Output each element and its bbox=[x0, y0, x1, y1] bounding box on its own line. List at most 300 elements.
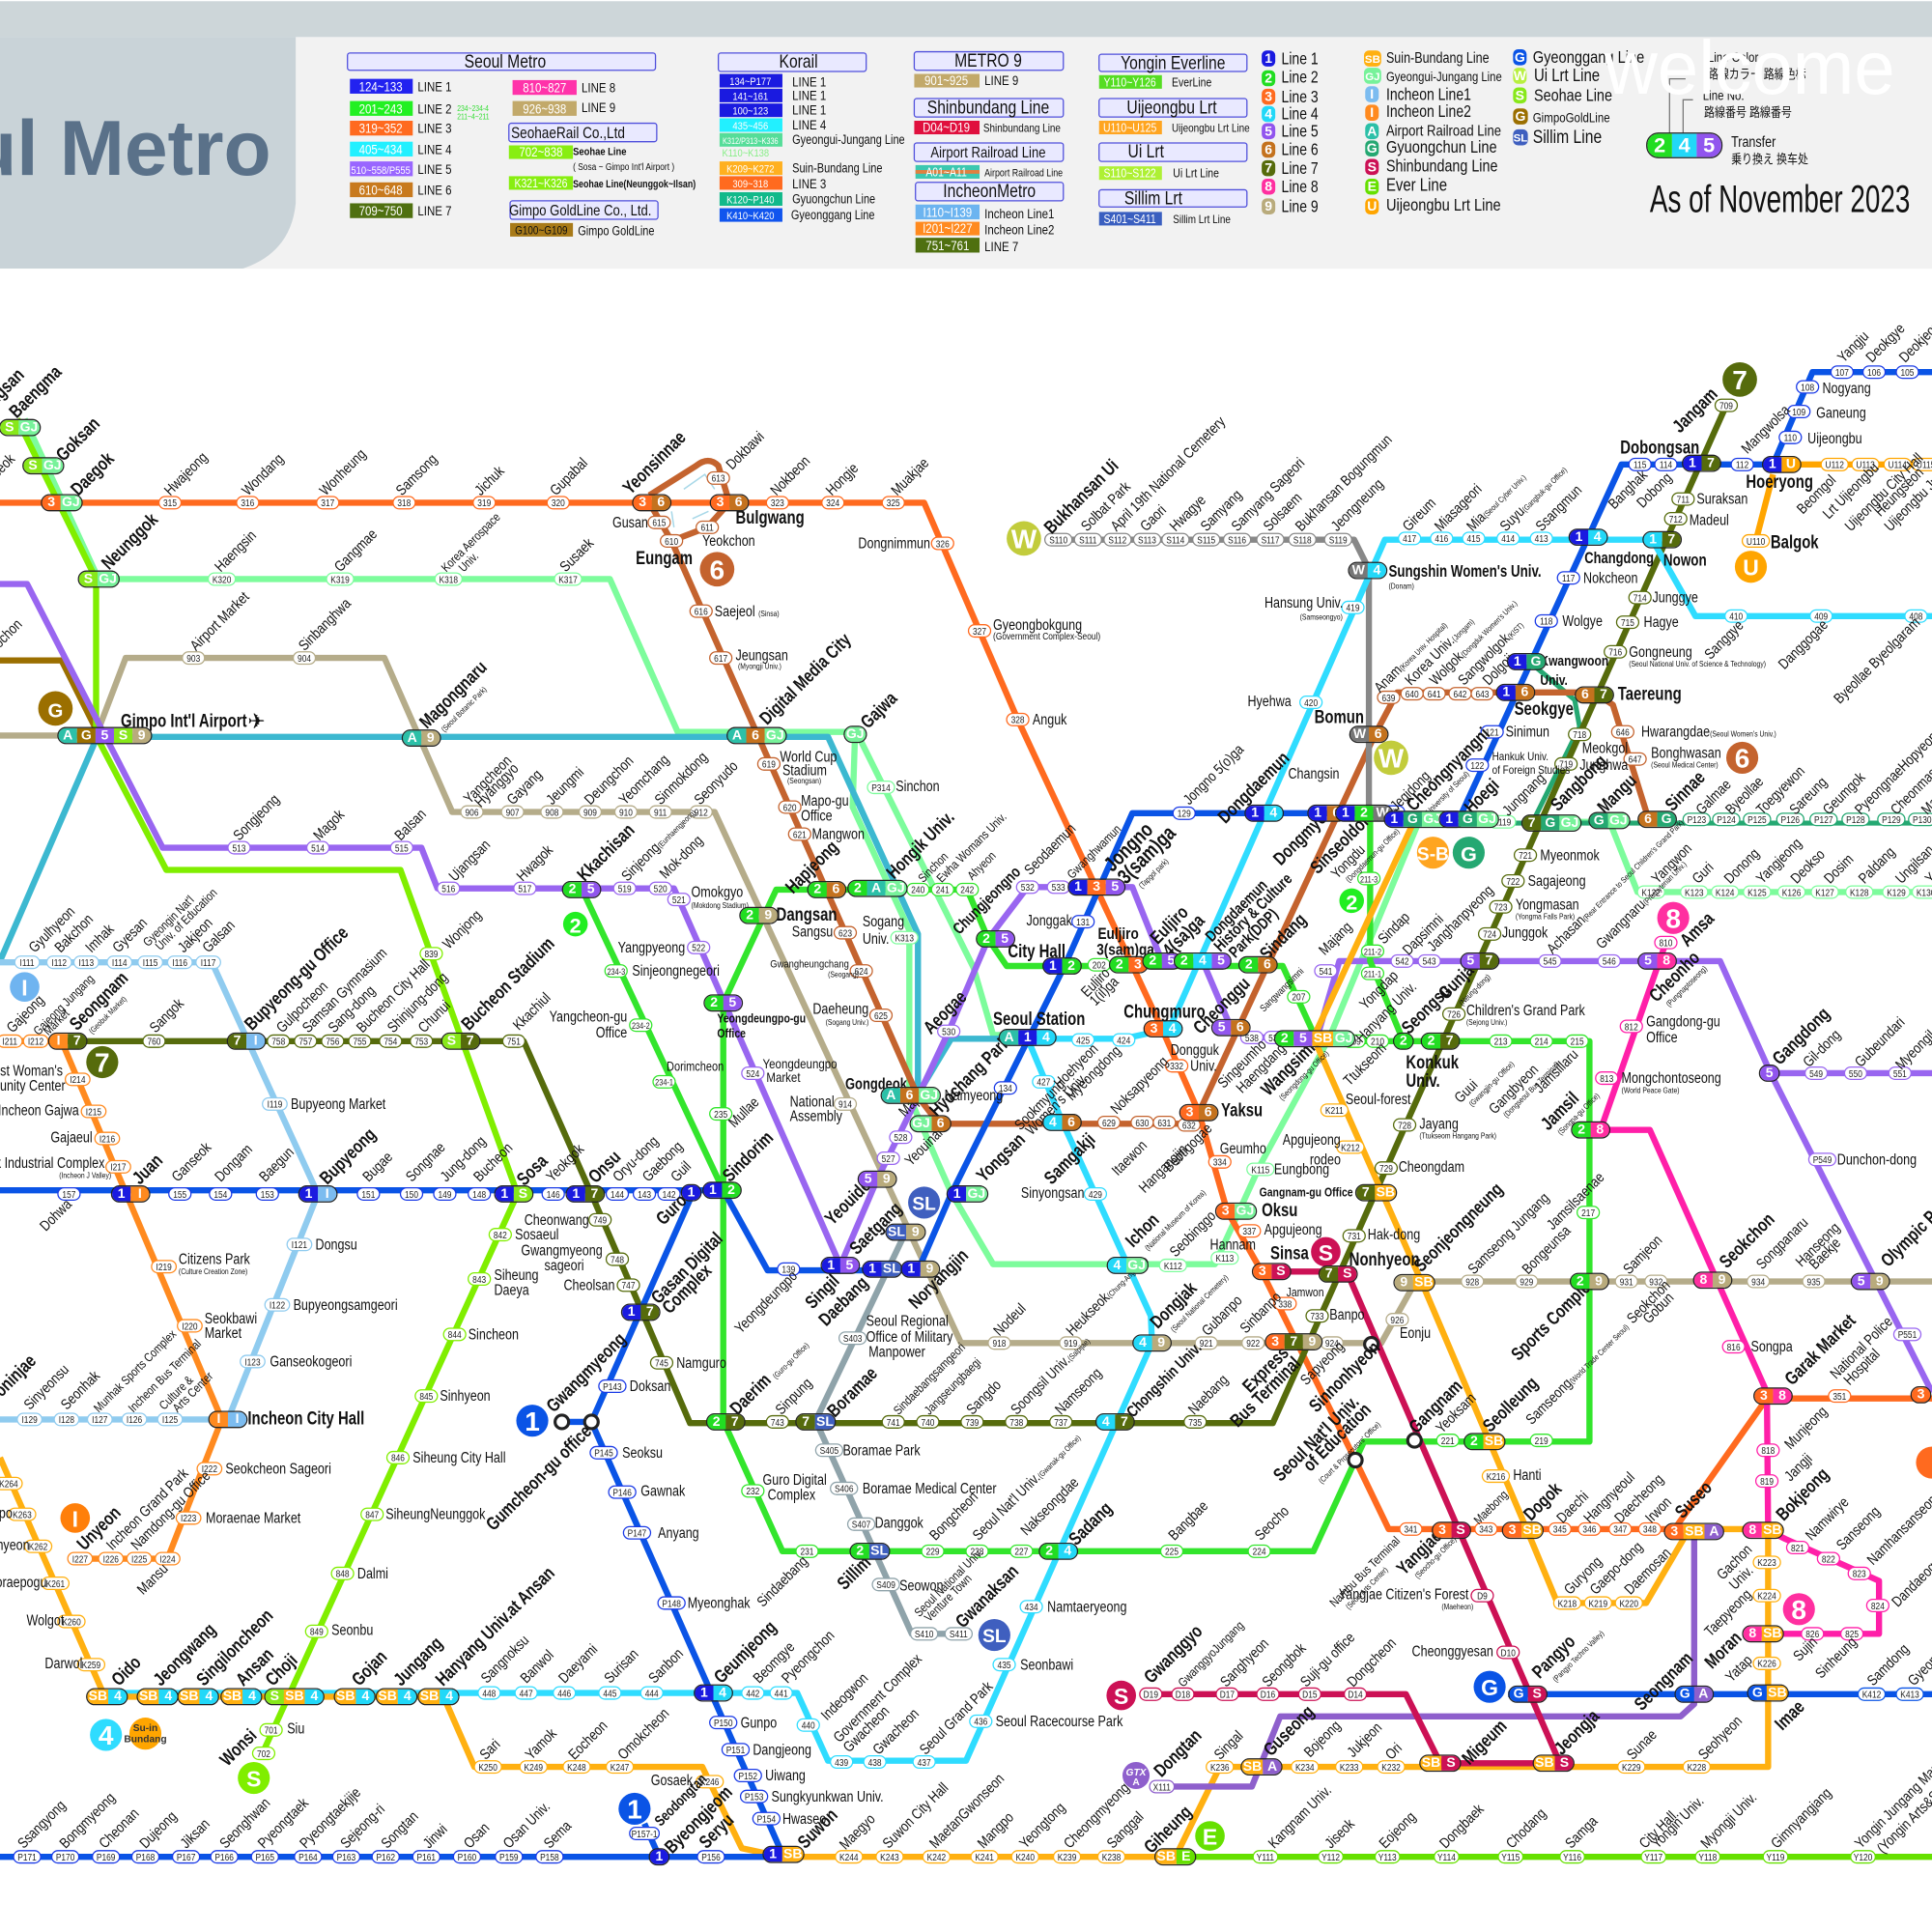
station labels: west: Hongje bbox=[822, 459, 862, 498]
station labels: northeast: (Pungnaptoseong) bbox=[1664, 963, 1709, 1009]
stations: Uijeongbu bbox=[1747, 460, 1932, 547]
interchange station pills: SL bbox=[888, 1225, 905, 1239]
station labels: south centre and east: Nonhyeon bbox=[1350, 1248, 1420, 1269]
station labels: southwest: Gwangmyeong bbox=[521, 1242, 603, 1259]
station labels: west: Haengsin bbox=[211, 526, 259, 575]
interchange station pills: 7 bbox=[467, 1034, 474, 1048]
station labels: southwest: Seodongtan bbox=[651, 1771, 710, 1830]
station labels: west: Dongnimmun bbox=[858, 534, 930, 552]
legend: Korail group: Gyeonggang Line bbox=[791, 208, 875, 222]
stations: Seohae line: 701 bbox=[265, 1725, 278, 1736]
stations: line 5: P549 bbox=[1813, 1154, 1832, 1165]
station labels: central: (Dongdaemun-gu Office) bbox=[1344, 826, 1402, 884]
stations: Incheon line 1: I125 bbox=[162, 1414, 178, 1425]
station labels: west: (Mokdong Stadium) bbox=[692, 900, 749, 910]
station labels: northeast: Ttukseom bbox=[1340, 1039, 1389, 1089]
interchange station pills: 6 bbox=[906, 1088, 913, 1103]
station labels: west: Hwajeong bbox=[160, 448, 211, 498]
interchange station pills: 7 bbox=[1486, 953, 1492, 969]
interchange station pills: SB bbox=[180, 1690, 199, 1704]
line 2 route bbox=[582, 813, 1589, 1551]
stations: line 6: 630 bbox=[1135, 1118, 1149, 1128]
station labels: southwest: Sosaeul bbox=[515, 1226, 558, 1242]
station labels: south centre and east: Ori bbox=[1381, 1740, 1405, 1763]
station labels: south centre and east: Seongnam bbox=[1630, 1647, 1697, 1715]
interchange station pills: 7 bbox=[1528, 815, 1536, 831]
legend: Everline, Uijeongbu, Ui, Sillim groups: U110~U125 bbox=[1103, 122, 1156, 135]
interchange station pills: 3 bbox=[1918, 1387, 1924, 1403]
station labels: northeast: Paldang bbox=[1855, 843, 1898, 887]
interchange station pills: 1 bbox=[655, 1850, 663, 1864]
station labels: south centre and east: Maegyo bbox=[836, 1810, 878, 1853]
interchange station pills: GJ bbox=[1335, 1032, 1352, 1046]
station labels: west: Mangwon bbox=[812, 825, 865, 842]
interchange station pills: 2 bbox=[1428, 1034, 1435, 1048]
stations: line 9: 931 bbox=[1620, 1277, 1634, 1288]
station labels: south centre and east: Mangpo bbox=[974, 1808, 1017, 1852]
interchange station pills: 4 bbox=[1102, 1414, 1110, 1430]
station labels: southwest: Gaebong bbox=[639, 1138, 686, 1184]
interchange station pills: 3 bbox=[47, 496, 55, 510]
station labels: northeast: Seoul-forest bbox=[1346, 1091, 1411, 1107]
station labels: southwest: Seokcheon Sageori bbox=[225, 1460, 331, 1477]
station labels: west: Daegok bbox=[66, 447, 119, 499]
legend: METRO 9, Shinbundang, Airport, Incheon groups: IncheonMetro bbox=[943, 181, 1036, 201]
station labels: southwest: Jung-dong bbox=[437, 1132, 489, 1184]
station labels: northeast: Samyang bbox=[1197, 486, 1245, 534]
stations: Ui line: S116 bbox=[1228, 535, 1246, 546]
station labels: southwest: Indeogwon bbox=[817, 1669, 871, 1723]
stations: Incheon line 2: I211 bbox=[2, 1037, 17, 1047]
legend: line number badges: GJ bbox=[1365, 71, 1380, 83]
station labels: northeast: Yongmasan bbox=[1516, 895, 1579, 913]
stations: line 3: 347 bbox=[1613, 1524, 1627, 1535]
line markers: round line badges: SL bbox=[982, 1627, 1007, 1647]
interchange station pills: 1 bbox=[1342, 806, 1350, 820]
station labels: central: Dongdaemun bbox=[1203, 877, 1271, 946]
line markers: round line badges: 1 bbox=[627, 1795, 642, 1825]
station labels: south centre and east: Taepyeong bbox=[1701, 1585, 1754, 1639]
interchange station pills: W bbox=[1376, 806, 1389, 820]
station labels: central: 1(il)ga bbox=[1086, 973, 1122, 1009]
line 5 route bbox=[0, 584, 1932, 1392]
station labels: northeast: Hagye bbox=[1644, 613, 1679, 631]
stations: line 5: 517 bbox=[518, 884, 531, 895]
stations: Incheon line 2: I225 bbox=[131, 1554, 147, 1565]
stations: line 2: 209 bbox=[1348, 1037, 1361, 1047]
stations: line 1: P159 bbox=[499, 1852, 519, 1862]
interchange station pills: 1 bbox=[1502, 685, 1510, 699]
stations: Suin-Bundang: K241 bbox=[975, 1852, 994, 1862]
interchange station pills: S bbox=[1533, 1687, 1542, 1701]
stations: Gyeongui-Jungang: K113 bbox=[1215, 1253, 1234, 1264]
stations: Incheon line 1: I122 bbox=[270, 1300, 285, 1311]
interchange station pills: 9 bbox=[883, 1172, 891, 1186]
station labels: south centre and east: Imae bbox=[1770, 1695, 1808, 1734]
stations: line 1: P165 bbox=[255, 1852, 274, 1862]
interchange station pills: 2 bbox=[1654, 133, 1665, 157]
legend: line names: Line 8 bbox=[1282, 179, 1319, 196]
station labels: central: Sindang bbox=[1255, 909, 1311, 964]
interchange station pills: 5 bbox=[1001, 931, 1009, 947]
stations: Uijeongbu: U112 bbox=[1826, 460, 1844, 470]
station labels: central: Sinyongsan bbox=[1021, 1184, 1084, 1201]
stations: line 6: 616 bbox=[695, 607, 708, 617]
interchange station pills: SB bbox=[1768, 1686, 1787, 1700]
stations: Incheon line 2: I223 bbox=[181, 1514, 196, 1523]
station labels: southwest: Incheon Grand Park bbox=[102, 1464, 192, 1553]
stations: line 2: 232 bbox=[746, 1486, 759, 1496]
station labels: south centre and east: Chodang bbox=[1502, 1804, 1549, 1852]
stations: Suin-Bundang: K226 bbox=[1757, 1659, 1776, 1669]
interchange station pills: S bbox=[1456, 1523, 1465, 1538]
station labels: south centre and east: Sanseong bbox=[1833, 1503, 1883, 1553]
station labels: west: Gangmae bbox=[330, 526, 381, 575]
station labels: central: Beotigogae bbox=[1160, 1120, 1215, 1175]
station labels: south centre and east: Suwon City Hall bbox=[879, 1779, 952, 1852]
stations: line 9: 907 bbox=[506, 808, 520, 818]
stations: line 7: 728 bbox=[1398, 1121, 1411, 1131]
legend: line number badges: 6 bbox=[1264, 141, 1272, 156]
stations: Seohae line: 845 bbox=[419, 1391, 433, 1402]
stations: Shinbundang: D10 bbox=[1501, 1648, 1516, 1658]
station labels: southwest: Choji bbox=[261, 1649, 301, 1690]
station labels: northeast: Solsaem bbox=[1260, 489, 1305, 534]
stations: line 5: 551 bbox=[1893, 1068, 1907, 1079]
station labels: south centre and east: Apgujeong bbox=[1264, 1221, 1322, 1237]
legend: line names: Ever Line bbox=[1386, 175, 1447, 195]
station labels: southwest: Hanyang Univ.at Ansan bbox=[431, 1562, 558, 1690]
stations: Gyeonggang, GTX: K413 bbox=[1900, 1690, 1919, 1700]
stations: line 2: 231 bbox=[800, 1547, 813, 1557]
stations: line 4: 438 bbox=[868, 1757, 882, 1768]
station labels: northeast: Hwagye bbox=[1166, 491, 1209, 534]
station labels: south centre and east: Gachon bbox=[1713, 1541, 1755, 1582]
station labels: northeast: Guui bbox=[1451, 1076, 1481, 1106]
interchange station pills: 7 bbox=[1325, 1266, 1333, 1282]
interchange station pills: 4 bbox=[1594, 529, 1602, 545]
line markers: round line badges: S bbox=[246, 1766, 261, 1791]
interchange station pills: 7 bbox=[1667, 532, 1675, 547]
interchange station pills: 5 bbox=[728, 996, 736, 1010]
station labels: south centre and east: GwanggyoJungang bbox=[1176, 1619, 1247, 1690]
station labels: central: Namyeong bbox=[945, 1087, 1003, 1103]
stations: Shinbundang bbox=[1144, 1591, 1516, 1700]
station labels: south centre and east: Seolleung bbox=[1478, 1372, 1542, 1436]
station labels: southwest: (Guro-gu Office) bbox=[771, 1341, 811, 1380]
stations: Ever line: Y114 bbox=[1437, 1852, 1456, 1862]
line markers: round line badges: 4 bbox=[99, 1720, 114, 1750]
station labels: south centre and east: National Police bbox=[1827, 1313, 1895, 1382]
station labels: west: Dokbawi bbox=[723, 428, 767, 472]
station labels: central: (Donam) bbox=[1388, 582, 1414, 591]
station labels: northeast: Gangnam-gu Office bbox=[1260, 1186, 1353, 1200]
stations: Suin-Bundang: K263 bbox=[13, 1510, 32, 1520]
station labels: southwest: Pyeongchon bbox=[778, 1627, 838, 1687]
station labels: south centre and east: Sadang bbox=[1065, 1497, 1116, 1549]
legend: Korail group: 134~P177 bbox=[729, 76, 772, 88]
interchange station pills: 6 bbox=[833, 882, 839, 897]
legend: line names: Airport Railroad Line bbox=[1386, 123, 1501, 140]
station labels: west: Yeongdeungpo bbox=[763, 1056, 838, 1071]
station labels: south centre and east: of Education bbox=[1298, 1399, 1376, 1475]
station labels: west: Gwangheungchang bbox=[770, 959, 849, 971]
legend: Seoul Metro group bbox=[348, 51, 696, 239]
station labels: northeast: Deokgye bbox=[1862, 320, 1908, 365]
stations: line 7: 711 bbox=[1677, 495, 1690, 505]
stations: line 2: 228 bbox=[970, 1547, 983, 1557]
station labels: southwest: Citizens Park bbox=[179, 1250, 251, 1267]
interchange station pills: S bbox=[1560, 1756, 1569, 1771]
station labels: west: Korea Aerospace bbox=[439, 510, 503, 575]
station labels: west: Jeungsan bbox=[735, 646, 788, 664]
stations: line 8: 826 bbox=[1805, 1629, 1819, 1639]
station labels: central: Yongsan bbox=[972, 1128, 1029, 1186]
station labels: west: Univ. of Education bbox=[153, 886, 220, 953]
station labels: west: Anguk bbox=[1033, 711, 1067, 727]
legend: Korail group: LINE 1 bbox=[792, 101, 826, 118]
legend: line number badges: I bbox=[1370, 104, 1374, 120]
station labels: northeast: Jangam bbox=[1668, 384, 1721, 437]
stations: Gyeongchun: P127 bbox=[1814, 814, 1833, 825]
station labels: west: Sogang bbox=[863, 913, 904, 929]
legend: Korail group: LINE 1 bbox=[792, 73, 826, 90]
station labels: west: Gajeong bbox=[3, 991, 47, 1036]
stations: Suin-Bundang: K240 bbox=[1015, 1852, 1035, 1862]
gold line route bbox=[0, 661, 96, 729]
interchange station pills: 5 bbox=[587, 882, 595, 897]
stations: Suin-Bundang: K211 bbox=[1325, 1105, 1344, 1116]
stations: line 6: 639 bbox=[1382, 693, 1395, 703]
legend: Seoul Metro group: 702~838 bbox=[519, 144, 563, 159]
interchange station pills: 5 bbox=[1644, 953, 1652, 969]
station labels: northeast: Hankuk Univ. bbox=[1492, 751, 1548, 763]
interchange station pills: 3 bbox=[1134, 957, 1142, 972]
stations: line 1: P158 bbox=[540, 1852, 559, 1862]
legend: how to read a transfer bbox=[1669, 49, 1808, 167]
stations: line 9: 910 bbox=[619, 808, 633, 818]
stations: Incheon line 1: I129 bbox=[21, 1414, 38, 1425]
stations: Ever line: Y116 bbox=[1563, 1852, 1581, 1862]
station labels: south centre and east: (Seoul National Cemetery) bbox=[1169, 1272, 1231, 1334]
station labels: west: Bakchon bbox=[51, 910, 97, 955]
interchange station pills: 1 bbox=[1049, 958, 1057, 974]
interchange station pills: 6 bbox=[1521, 685, 1528, 699]
station labels: south centre and east: Bus Terminal bbox=[1226, 1352, 1304, 1432]
station labels: southwest: Singiloncheon bbox=[192, 1605, 277, 1690]
station labels: southwest: Osan bbox=[460, 1819, 493, 1852]
station labels: southwest: Gojan bbox=[347, 1646, 391, 1690]
station labels: southwest: Sillim bbox=[833, 1551, 875, 1594]
station labels: west: Bupyeong Market bbox=[291, 1095, 385, 1112]
station labels: south centre and east: Suji-gu office bbox=[1296, 1629, 1358, 1690]
line markers: round line badges: U bbox=[1743, 555, 1759, 581]
interchange station pills: 9 bbox=[1157, 1336, 1165, 1350]
interchange station pills: I bbox=[216, 1412, 220, 1427]
interchange station pills: GJ bbox=[20, 420, 38, 435]
interchange station pills: SB bbox=[1314, 1032, 1332, 1046]
interchange station pills: 2 bbox=[1045, 1544, 1053, 1559]
station labels: west: (Government Complex-Seoul) bbox=[993, 631, 1100, 641]
stations: line 9: 903 bbox=[186, 653, 200, 664]
legend: Seoul Metro group: LINE 7 bbox=[417, 203, 452, 218]
station labels: west: Yeomchang bbox=[615, 751, 672, 808]
stations: line 2: 213 bbox=[1494, 1037, 1508, 1047]
station labels: southwest: Seonhak bbox=[57, 1366, 103, 1412]
station labels: northeast: April 19th National Cemetery bbox=[1107, 412, 1229, 534]
stations: Ui line: S110 bbox=[1049, 535, 1067, 546]
station labels: northeast: Junggye bbox=[1652, 589, 1698, 606]
interchange station pills: I bbox=[57, 1034, 61, 1048]
line markers: round line badges: G bbox=[1481, 1675, 1498, 1700]
station labels: west: Bucheon Stadium bbox=[457, 932, 558, 1035]
interchange station pills: 2 bbox=[813, 882, 821, 897]
station labels: southwest: Dohwa bbox=[36, 1195, 74, 1235]
station labels: south centre and east: Seoul Nat'l Univ. bbox=[1268, 1391, 1363, 1486]
station labels: northeast: Yangjeong bbox=[1752, 835, 1804, 887]
stations: Gyeongui-Jungang: K128 bbox=[1850, 888, 1869, 897]
station labels: southwest: Yeongdeungpo bbox=[731, 1267, 801, 1336]
stations: line 5: 515 bbox=[395, 843, 409, 854]
station labels: south centre and east: Seocho bbox=[1251, 1502, 1293, 1544]
interchange station pills: 5 bbox=[1766, 1065, 1774, 1081]
interchange station pills: A bbox=[408, 730, 417, 746]
station labels: central: Sinseoldong bbox=[1306, 802, 1382, 878]
stations: line 4: 440 bbox=[802, 1720, 815, 1731]
legend: line number badges: 2 bbox=[1264, 70, 1272, 85]
line markers: round line badges: 8 bbox=[1791, 1595, 1806, 1625]
stations: line 9: 911 bbox=[654, 808, 667, 818]
station labels: northeast: Hoeryong bbox=[1746, 470, 1813, 493]
stations: Sillim line: S403 bbox=[843, 1333, 862, 1344]
interchange station pills: I bbox=[236, 1412, 239, 1427]
stations: line 6: 617 bbox=[714, 653, 727, 664]
legend: Korail group: K209~K272 bbox=[726, 164, 775, 176]
stations: line 5: 543 bbox=[1423, 956, 1436, 967]
station labels: south centre and east: Yatap bbox=[1721, 1651, 1755, 1685]
interchange station pills: G bbox=[1545, 815, 1555, 831]
stations: line 3: 318 bbox=[397, 497, 411, 508]
stations: Gyeonggang, GTX bbox=[1862, 1690, 1919, 1700]
stations: Shinbundang: D18 bbox=[1176, 1690, 1190, 1700]
station labels: west: Wondang bbox=[239, 450, 287, 498]
interchange station pills: GJ bbox=[766, 728, 784, 743]
line 8 route bbox=[1601, 943, 1879, 1634]
station labels: south centre and east: Hospital bbox=[1840, 1346, 1883, 1388]
station labels: southwest: Noryangjin bbox=[904, 1244, 973, 1313]
interchange station pills: SB bbox=[1763, 1627, 1782, 1641]
station labels: southwest: Ganseok bbox=[168, 1138, 214, 1184]
stations: line 1: 146 bbox=[547, 1189, 560, 1200]
stations: Incheon line 2: I217 bbox=[110, 1162, 127, 1173]
station labels: south centre and east: Jamwon bbox=[1287, 1286, 1324, 1299]
station labels: northeast: Mangwolsa bbox=[1738, 401, 1793, 457]
station labels: southwest: Bongmyeong bbox=[56, 1789, 118, 1852]
line 1 route bbox=[0, 372, 1932, 1857]
interchange station pills: 4 bbox=[248, 1690, 256, 1704]
stations: line 2: 202 bbox=[1093, 960, 1106, 971]
interchange station pills: 9 bbox=[1309, 1334, 1316, 1350]
stations: line 7: 735 bbox=[1188, 1417, 1202, 1428]
interchange station pills: 3 bbox=[1222, 1204, 1230, 1218]
stations: line 6: 629 bbox=[1102, 1118, 1116, 1128]
interchange station pills: SB bbox=[1763, 1523, 1782, 1538]
interchange station pills: G bbox=[1407, 812, 1418, 827]
stations: line 5: 541 bbox=[1319, 966, 1332, 977]
station labels: southwest: Ssangyong bbox=[14, 1797, 69, 1852]
stations: line 6 bbox=[652, 473, 1642, 1131]
line markers: round line badges: I bbox=[21, 976, 28, 1001]
stations: line 4: 425 bbox=[1076, 1036, 1090, 1046]
station labels: northeast: Sareung bbox=[1786, 773, 1830, 817]
interchange station pills: 5 bbox=[1111, 880, 1119, 895]
stations: line 4: 444 bbox=[645, 1689, 659, 1699]
stations: line 7: 754 bbox=[384, 1037, 397, 1047]
stations: line 4: 414 bbox=[1501, 533, 1515, 544]
station labels: southwest: Byeongjeom bbox=[660, 1781, 736, 1858]
stations: line 3: 316 bbox=[241, 497, 254, 508]
legend: Seoul Metro group: 510~558/P555 bbox=[351, 165, 411, 177]
station labels: west: Wonheung bbox=[316, 445, 369, 498]
station labels: south centre and east: Dongtan bbox=[1150, 1724, 1206, 1781]
station labels: northeast: Banghak bbox=[1605, 466, 1651, 512]
line markers: round line badges: S bbox=[1114, 1684, 1128, 1709]
station labels: central: Jegidong bbox=[1386, 767, 1434, 814]
legend: line names: Shinbundang Line bbox=[1386, 157, 1498, 176]
station labels: central: Cheonggu bbox=[1188, 973, 1254, 1038]
stations: line 7: 715 bbox=[1621, 617, 1634, 628]
station labels: northeast: Kwangwoon bbox=[1540, 653, 1608, 668]
station labels: central: Yeouinaru bbox=[901, 1119, 952, 1169]
stations: Shinbundang: D19 bbox=[1144, 1690, 1158, 1700]
interchange station pills: 9 bbox=[764, 908, 772, 923]
station labels: central: Dongmyo bbox=[1268, 807, 1331, 869]
stations: Suin-Bundang: K259 bbox=[82, 1660, 100, 1670]
stations: line 1 bbox=[17, 367, 1914, 1862]
station labels: northeast bbox=[1039, 313, 1932, 1242]
legend: Seoul Metro group: G100~G109 bbox=[515, 225, 568, 238]
station labels: northeast: Dapsimni bbox=[1399, 910, 1446, 958]
stations: line 1: P152 bbox=[738, 1771, 757, 1781]
stations: Suin-Bundang: K234 bbox=[1295, 1762, 1315, 1773]
interchange station pills: 4 bbox=[1679, 133, 1690, 157]
station labels: southwest: Dujeong bbox=[136, 1807, 180, 1852]
stations: line 5: 530 bbox=[942, 1027, 955, 1037]
interchange station pills: 2 bbox=[1180, 953, 1188, 969]
stations: line 8: 824 bbox=[1871, 1601, 1885, 1611]
station labels: south centre and east: Namtaeryeong bbox=[1047, 1598, 1126, 1615]
interchange station pills: 8 bbox=[1778, 1388, 1786, 1404]
station labels: west: Kkachiul bbox=[509, 989, 554, 1034]
station labels: west: Bucheon City Hall bbox=[353, 955, 433, 1036]
interchange station pills: 3 bbox=[1438, 1523, 1446, 1538]
stations: line 8: 812 bbox=[1625, 1022, 1638, 1033]
stations: Incheon line 2: I216 bbox=[99, 1134, 115, 1145]
interchange station pills: A bbox=[886, 1088, 895, 1103]
stations: Gyeongchun bbox=[1688, 814, 1932, 825]
station labels: west: Mok-dong bbox=[656, 832, 706, 882]
interchange station pills: 7 bbox=[73, 1034, 81, 1048]
stations: Suin-Bundang: K244 bbox=[839, 1852, 859, 1862]
station labels: northeast: Sanggye bbox=[1701, 616, 1747, 663]
station labels: west: Shinjung-dong bbox=[384, 969, 451, 1036]
Gyeonggang route bbox=[1508, 1691, 1932, 1696]
stations: Suin-Bundang: K219 bbox=[1589, 1599, 1607, 1608]
station labels: northeast: Nowon bbox=[1663, 552, 1707, 570]
stations: line 6: 625 bbox=[874, 1010, 888, 1021]
stations: line 1: 149 bbox=[438, 1189, 451, 1200]
station labels: southwest: Songtan bbox=[378, 1807, 421, 1852]
